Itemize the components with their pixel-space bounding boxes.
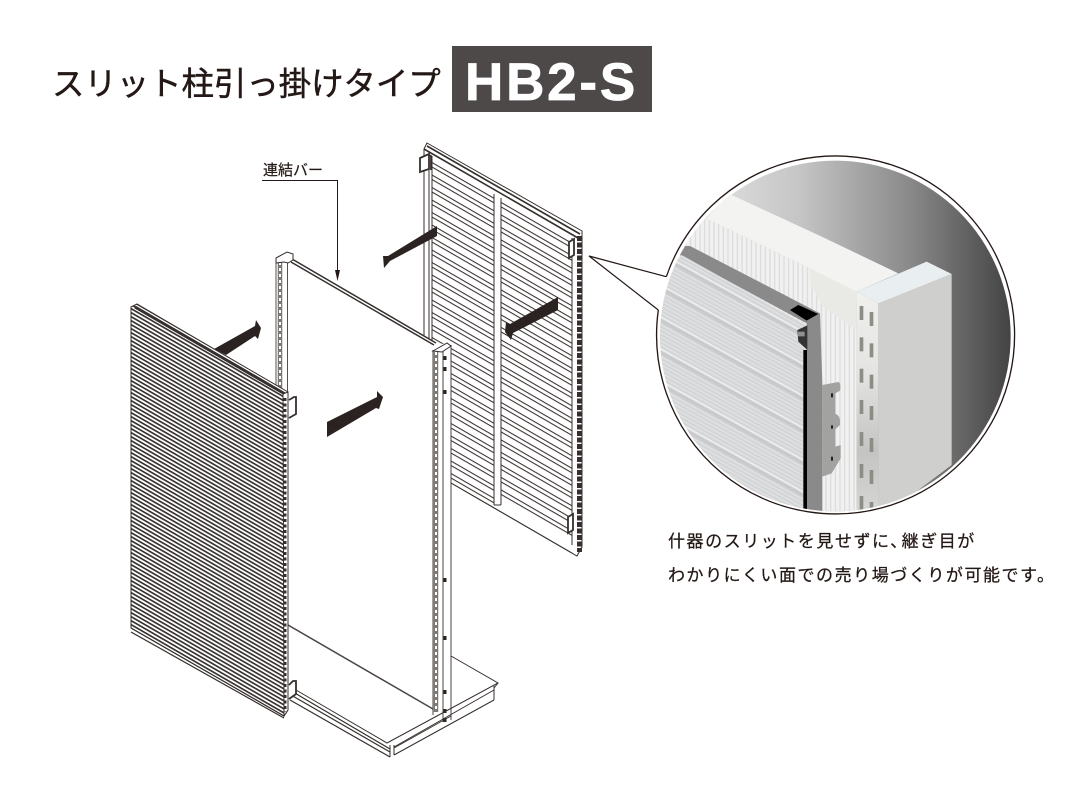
caption: 什器のスリットを見せずに、継ぎ目が [668, 532, 976, 551]
label: connecting bar [262, 162, 340, 281]
base platform [290, 656, 498, 757]
back panel hook top left [420, 154, 431, 172]
arrow on centre panel [327, 391, 383, 437]
exploded fixture diagram [131, 143, 582, 757]
top rail [707, 195, 898, 292]
arrow behind back panel [383, 226, 437, 268]
back panel hook top right [569, 239, 574, 258]
front panel hook bottom [289, 681, 296, 699]
front louvre panel [131, 304, 288, 718]
front upright [433, 343, 451, 722]
front panel hook top [289, 397, 296, 418]
circular detail view [650, 150, 1020, 520]
louvre face [660, 255, 807, 508]
connecting bar [291, 259, 436, 345]
back panel hook bottom right [568, 514, 573, 533]
black edge strip [803, 350, 807, 517]
arrow on back panel [505, 297, 558, 340]
centre panel with uprights [276, 252, 451, 755]
caption: わかりにくい面での売り場づくりが可能です。 [668, 566, 1056, 585]
detail magnifier [589, 150, 1020, 520]
label: connecting bar: 連結バー [263, 162, 323, 179]
hanging bracket [822, 382, 841, 477]
back louvre panel [424, 143, 582, 556]
model badge: HB2-S [465, 53, 638, 112]
panel frame [680, 246, 822, 520]
upright front face [878, 274, 952, 520]
upright side with slots [857, 292, 878, 520]
ribbed back wall [670, 218, 857, 520]
caption [668, 532, 1056, 585]
title: スリット柱引っ掛けタイプ [52, 66, 441, 102]
circle outline [657, 156, 1015, 514]
arrow from front panel [214, 320, 261, 355]
callout pointer [589, 256, 666, 310]
upright cap [857, 262, 952, 303]
